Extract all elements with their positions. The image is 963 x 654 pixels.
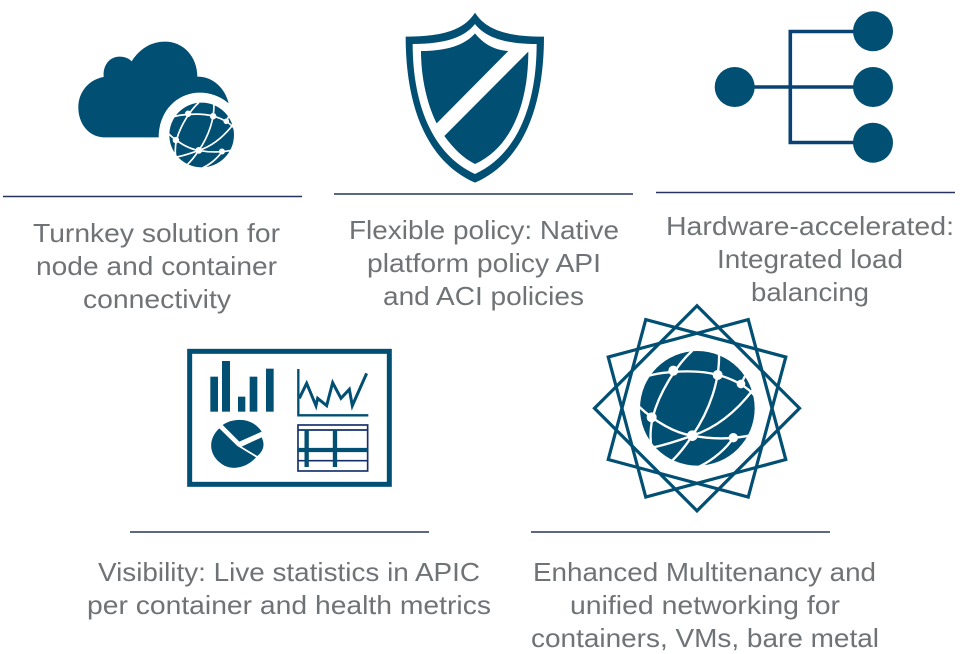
text: hardware-accelerated: Hardware-accelerated: [666, 211, 954, 241]
dashboard frame [190, 351, 389, 484]
text: visibility: Visibility: Live statistics in APIC [98, 557, 480, 587]
divider [130, 531, 429, 533]
text: visibility: per container and health metrics [87, 590, 491, 620]
divider [531, 531, 830, 533]
cloud [78, 42, 229, 137]
text: turnkey [33, 218, 280, 314]
text: flexible policy: platform policy API [367, 248, 601, 278]
line chart [298, 369, 368, 415]
pie chart [211, 420, 264, 468]
panel: flexible policy [334, 13, 633, 311]
panel: turnkey solution [3, 42, 302, 314]
text: turnkey: Turnkey solution for [33, 218, 280, 248]
divider [656, 192, 955, 194]
panel: visibility [87, 351, 491, 620]
icon: load balancing tree [715, 11, 893, 163]
text: visibility [87, 557, 491, 620]
text: enhanced multitenancy: unified networking for [570, 590, 840, 620]
text: hardware-accelerated [666, 211, 954, 307]
text: hardware-accelerated: Integrated load [717, 244, 903, 274]
panel: enhanced multitenancy [531, 306, 879, 653]
text: turnkey: connectivity [83, 284, 231, 314]
globe [638, 351, 756, 467]
icon: star globe [594, 306, 800, 511]
text: enhanced multitenancy: Enhanced Multitenancy and [533, 557, 876, 587]
table [298, 425, 368, 471]
divider [3, 196, 302, 198]
icon: cloud with globe [78, 42, 235, 168]
star frame [594, 306, 800, 511]
text: flexible policy [349, 215, 619, 311]
panel: hardware-accelerated [656, 11, 955, 307]
text: enhanced multitenancy: containers, VMs, bare metal [531, 623, 879, 653]
text: enhanced multitenancy [531, 557, 879, 653]
text: flexible policy: and ACI policies [383, 281, 584, 311]
icon: dashboard [190, 351, 389, 484]
divider [334, 193, 633, 195]
globe [168, 102, 235, 168]
bar chart [210, 361, 274, 412]
text: turnkey: node and container [36, 251, 277, 281]
icon: shield [406, 13, 544, 183]
text: hardware-accelerated: balancing [751, 277, 869, 307]
text: flexible policy: Flexible policy: Native [349, 215, 619, 245]
